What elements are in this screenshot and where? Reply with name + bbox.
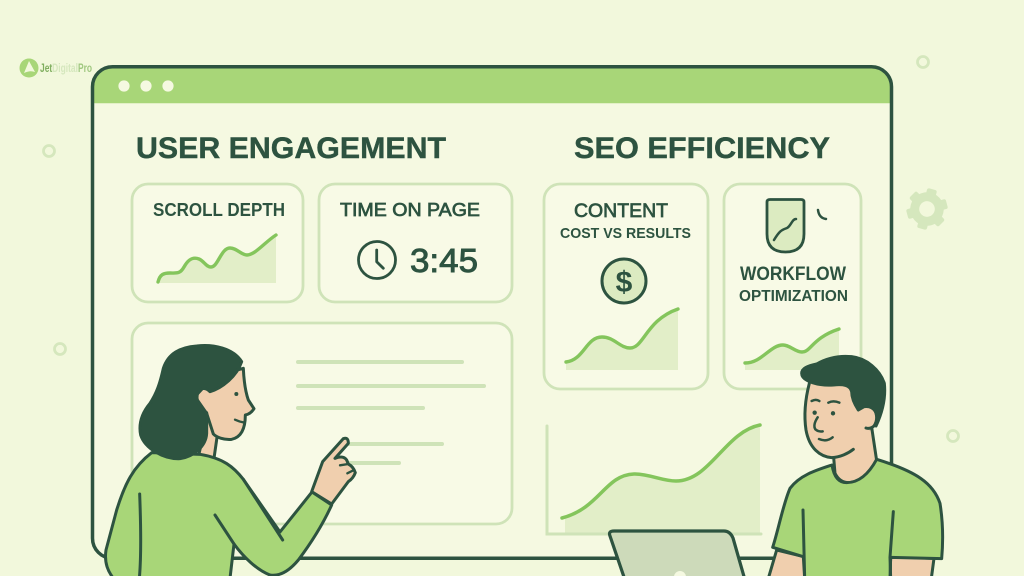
- chart: workflow: [745, 329, 839, 370]
- panel: content cost vs results: CONTENT: [574, 201, 668, 222]
- decorative circle left upper: [44, 146, 54, 156]
- hair: [802, 356, 885, 426]
- panel: workflow optimization: WORKFLOW: [740, 263, 847, 285]
- time value: 3:45: [410, 242, 478, 279]
- text lines: [298, 362, 484, 463]
- icon: dollar: [602, 259, 646, 303]
- icon: laptop: [610, 531, 745, 576]
- illustration: woman pointing: [106, 346, 355, 576]
- illustration: man with laptop: [768, 356, 943, 576]
- decorative circle left lower: [54, 344, 66, 354]
- panel: article preview: [132, 323, 512, 524]
- window control dots: [118, 80, 174, 92]
- logo: JetDigitalPro: [40, 63, 92, 75]
- sweater: [106, 453, 332, 576]
- icon: dollar: $: [616, 266, 633, 299]
- panel: time on page: TIME ON PAGE: [340, 200, 480, 220]
- icon: small hook: [818, 210, 826, 219]
- face: [805, 383, 877, 458]
- panel: workflow optimization: [724, 184, 861, 389]
- panel: content cost vs results: COST VS RESULTS: [560, 225, 691, 242]
- panel: scroll depth: [132, 184, 303, 302]
- heading: seo efficiency: SEO EFFICIENCY: [574, 132, 830, 165]
- panel: workflow optimization: OPTIMIZATION: [739, 288, 848, 305]
- neck: [198, 413, 217, 458]
- chart: scroll depth: [158, 235, 276, 283]
- shirt: [773, 459, 943, 576]
- face: [195, 368, 254, 439]
- eyes, brows, nose, smile: [812, 410, 817, 415]
- icon: shield chart: [767, 200, 804, 252]
- icon: gear: [902, 184, 952, 234]
- eye and smile: [234, 392, 238, 396]
- hand: [312, 438, 355, 504]
- chart: content: [566, 309, 678, 370]
- panel: scroll depth: SCROLL DEPTH: [153, 200, 285, 220]
- heading: user engagement: USER ENGAGEMENT: [136, 132, 446, 165]
- decorative circle right: [948, 430, 958, 442]
- panel: time on page: [319, 184, 512, 302]
- panel: content cost vs results: [544, 184, 708, 389]
- neck: [833, 427, 877, 483]
- logo: [20, 58, 92, 78]
- hair: [140, 346, 242, 459]
- chart: main area chart: [547, 425, 761, 534]
- decorative circle top right: [918, 56, 928, 68]
- arms: [768, 550, 934, 576]
- ear: [858, 406, 877, 428]
- icon: clock: [358, 242, 396, 278]
- sweater fold lines: [139, 494, 141, 576]
- browser window: [92, 67, 892, 558]
- shirt fold lines: [803, 510, 893, 576]
